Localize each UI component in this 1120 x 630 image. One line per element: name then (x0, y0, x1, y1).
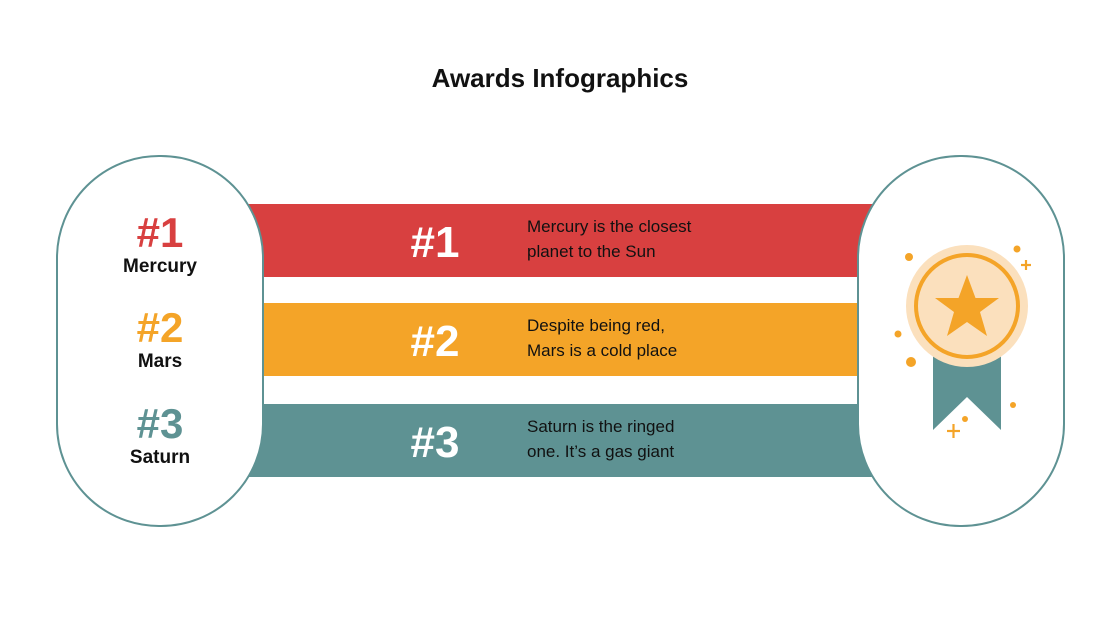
band: #1 red (200, 204, 900, 277)
text: mercury description: Mercury is the closest (527, 217, 691, 236)
panel: right medal pill (857, 155, 1065, 527)
band: #2 orange (200, 303, 900, 376)
rank 1: #1 (137, 209, 183, 256)
rank 2: #2 (137, 304, 183, 351)
rank 1 (123, 209, 197, 277)
text: mercury description: planet to the Sun (527, 242, 656, 261)
band: #3 teal (200, 404, 900, 477)
text: saturn description: Saturn is the ringed (527, 417, 674, 436)
rank 2 (137, 304, 183, 372)
rank 1: Mercury (123, 256, 197, 277)
text: mercury description (527, 217, 692, 261)
rank 2: Mars (138, 351, 182, 372)
rank 3 (130, 400, 190, 468)
band: #1 red: #1 (411, 218, 459, 267)
title: Awards Infographics (432, 63, 688, 93)
band: #3 teal: #3 (411, 418, 459, 467)
text: mars description: Mars is a cold place (527, 341, 677, 360)
panel: left ranking pill (56, 155, 264, 527)
text: saturn description: one. It’s a gas giant (527, 442, 674, 461)
text: mars description: Despite being red, (527, 316, 665, 335)
text: mars description (527, 316, 677, 360)
rank 3: #3 (137, 400, 183, 447)
text: saturn description (527, 417, 674, 461)
icon: medal (894, 245, 1031, 438)
rank 3: Saturn (130, 447, 190, 468)
band: #2 orange: #2 (411, 317, 459, 366)
